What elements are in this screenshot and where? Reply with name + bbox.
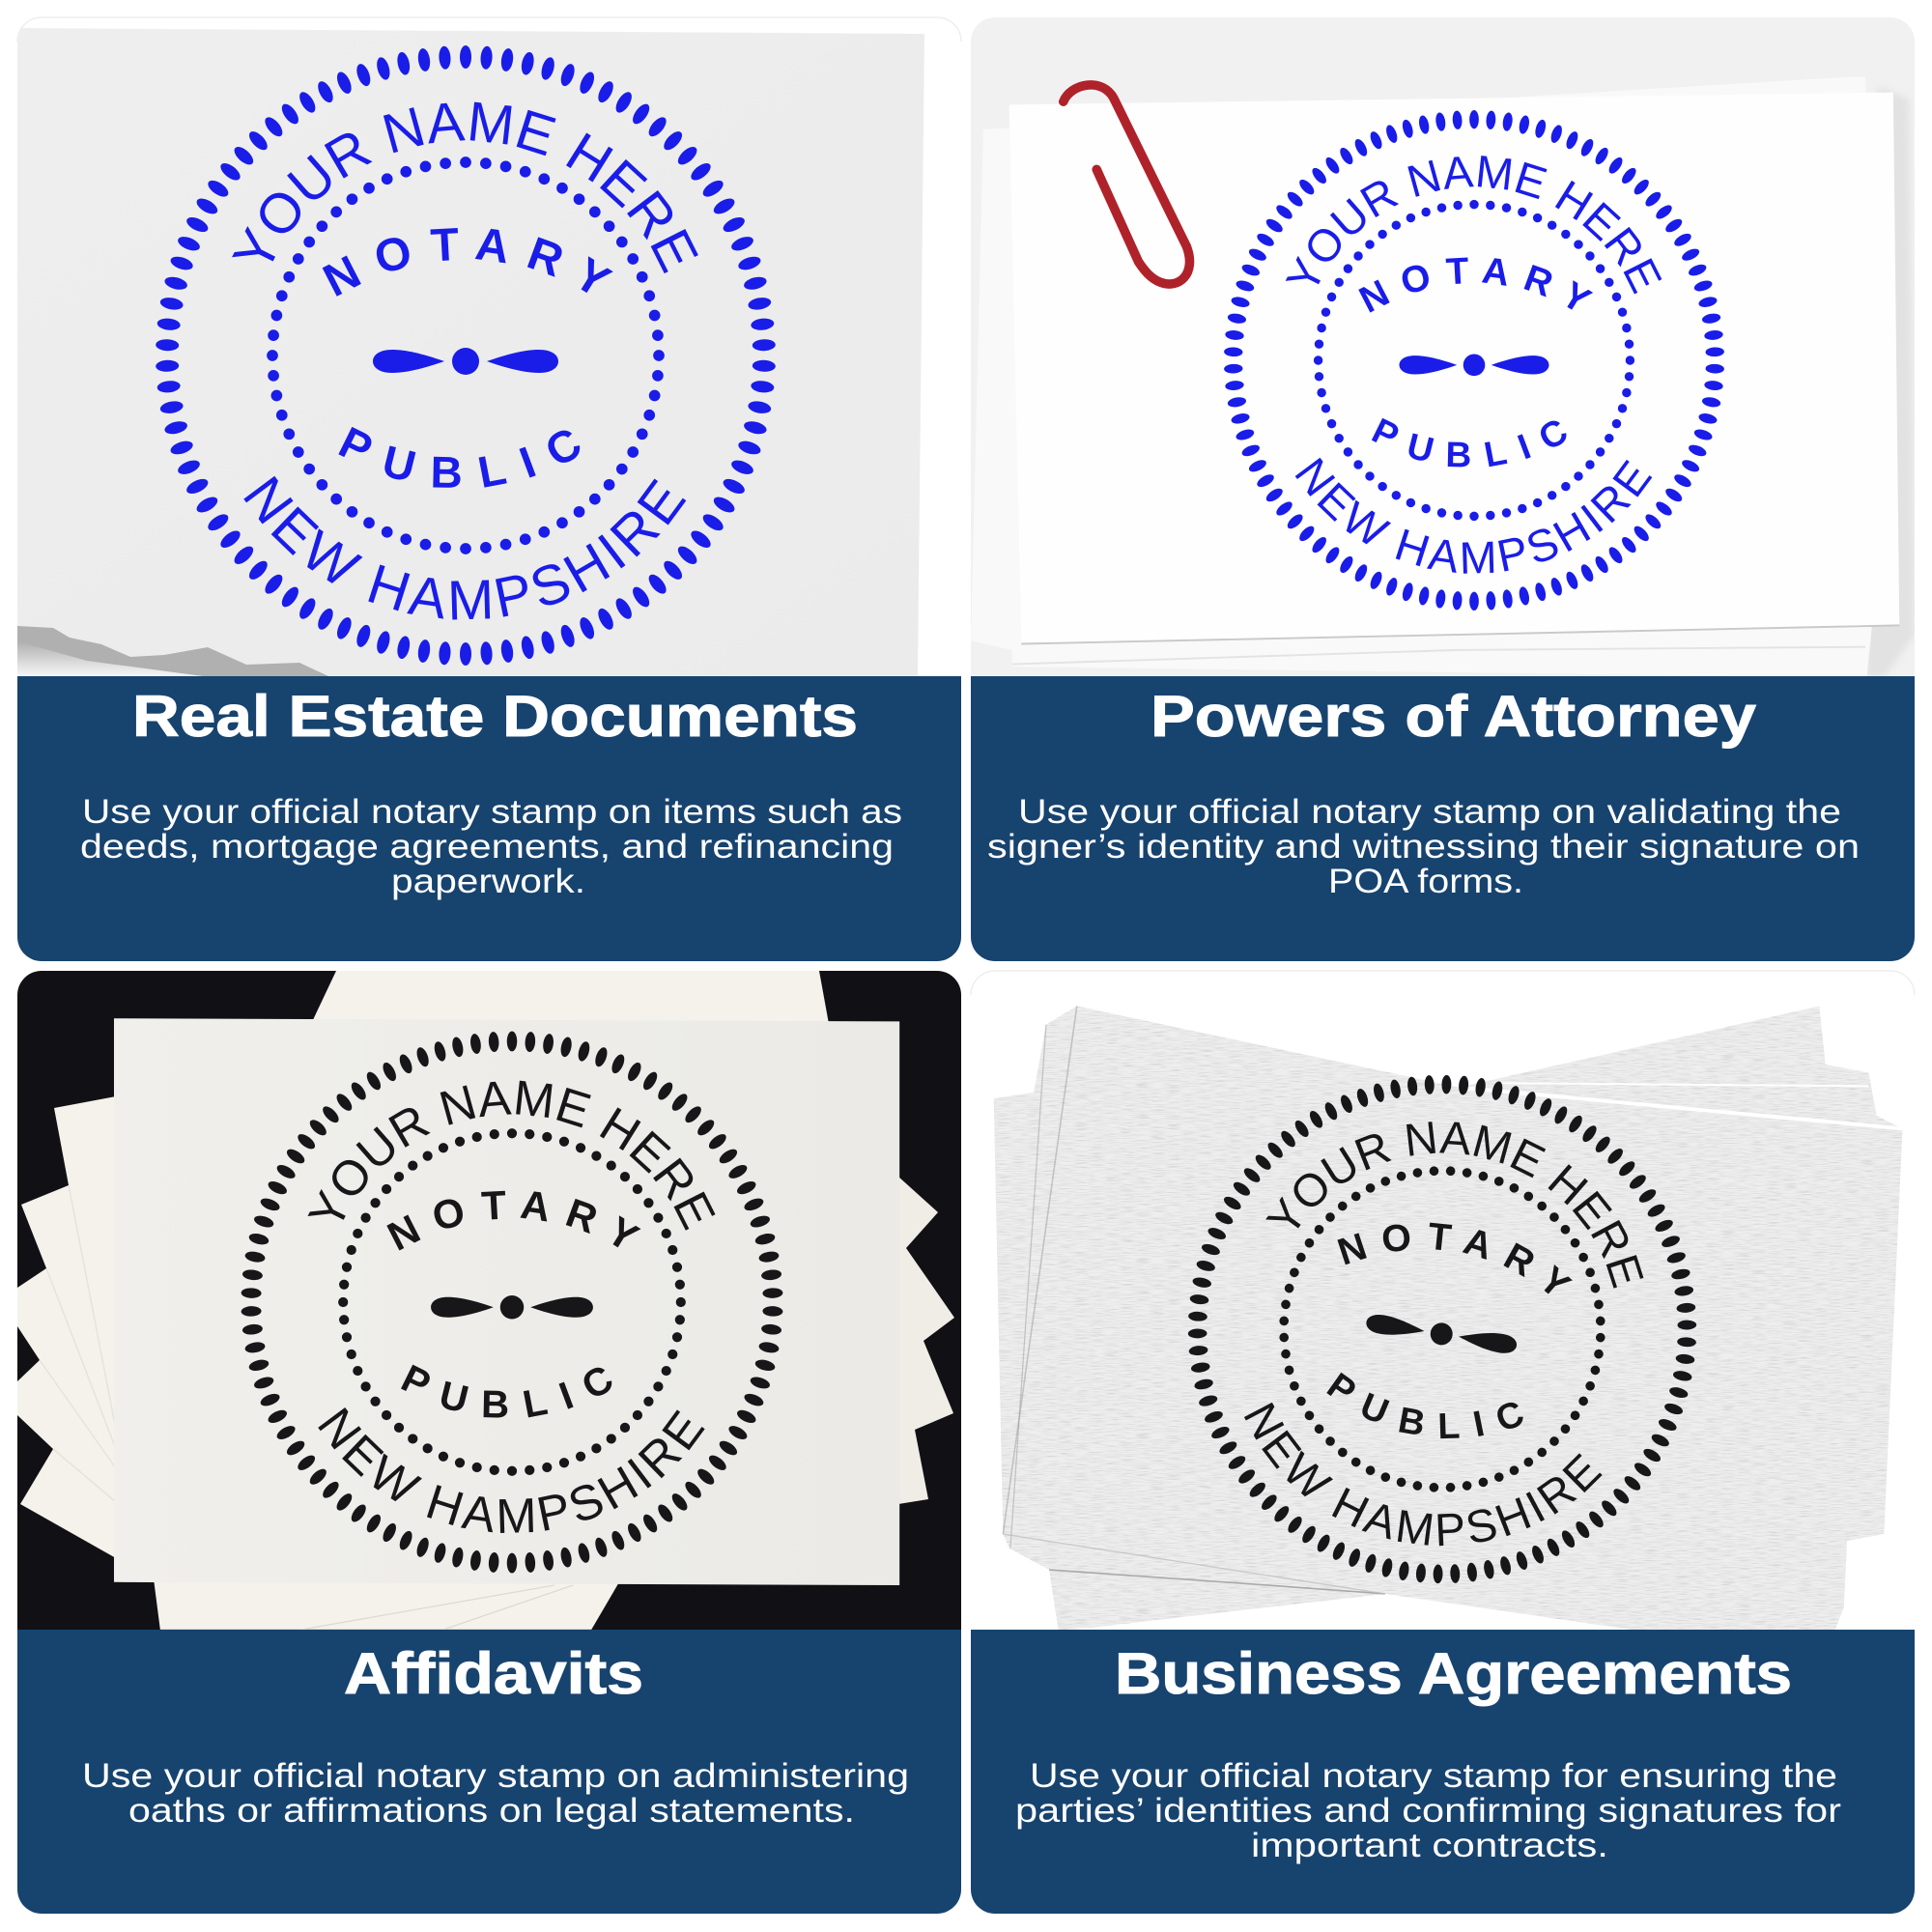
text: notary: NOTARY (323, 228, 613, 297)
stamp: blue notary seal (156, 45, 776, 666)
panel: Affidavits (17, 971, 961, 1914)
text: new hampshire: NEW HAMPSHIRE (1294, 458, 1652, 574)
photo: paper stack with paperclip (971, 17, 1915, 678)
body text: oaths or affirmations on legal statements. (128, 1792, 855, 1830)
icon: red paperclip (1064, 85, 1189, 284)
text: new hampshire: NEW HAMPSHIRE (1244, 1403, 1602, 1546)
text: public: PUBLIC (1372, 417, 1567, 468)
caption band (971, 676, 1915, 961)
body text: Use your official notary stamp on validating the (1018, 793, 1841, 831)
heading: Real Estate Documents (132, 684, 858, 749)
panel: Business Agreements (970, 970, 1915, 1914)
stamp: black notary seal (242, 1032, 782, 1573)
inner dotted ring (1319, 205, 1630, 516)
inner dotted ring (343, 1133, 681, 1471)
text: public: PUBLIC (401, 1364, 612, 1418)
body text: parties’ identities and confirming signatures for (1015, 1792, 1841, 1830)
outer oval ring (66, 0, 866, 738)
caption band (971, 1630, 1915, 1914)
text: notary: NOTARY (1358, 257, 1594, 313)
text: new hampshire: NEW HAMPSHIRE (243, 475, 686, 620)
text: your name here: YOUR NAME HERE (1265, 1122, 1644, 1289)
panel: Powers of Attorney (971, 17, 1915, 961)
body text: important contracts. (1251, 1827, 1608, 1864)
ornament (431, 1295, 593, 1319)
text: notary: NOTARY (1337, 1223, 1573, 1294)
body text: deeds, mortgage agreements, and refinancing (80, 828, 894, 866)
text: public: PUBLIC (338, 427, 580, 488)
heading: Business Agreements (1115, 1641, 1792, 1706)
photo: textured paper stack (971, 971, 1915, 1632)
outer oval ring (1151, 51, 1797, 669)
body text: POA forms. (1328, 863, 1523, 900)
text: new hampshire: NEW HAMPSHIRE (318, 1407, 705, 1533)
caption band (17, 1630, 961, 1914)
photo: fanned cream cards on black (17, 971, 961, 1630)
ornament (1400, 355, 1548, 376)
panel: Real Estate Documents (17, 16, 962, 961)
stamp: blue notary seal (1224, 110, 1724, 611)
body text (987, 793, 1860, 900)
body text: paperwork. (391, 863, 585, 900)
inner dotted ring (272, 162, 659, 549)
text: public: PUBLIC (1326, 1372, 1523, 1439)
body text: signer’s identity and witnessing their signature on (987, 828, 1860, 866)
text: your name here: YOUR NAME HERE (1285, 156, 1662, 294)
heading: Affidavits (344, 1641, 643, 1706)
caption band (17, 676, 961, 961)
body text (80, 793, 902, 900)
ornament (373, 348, 558, 375)
photo: torn grey paper (17, 17, 961, 676)
outer oval ring (1069, 968, 1815, 1690)
body text: Use your official notary stamp for ensuring the (1030, 1757, 1837, 1795)
inner dotted ring (1261, 1148, 1624, 1511)
stamp: black notary seal, rotated (1188, 1074, 1696, 1584)
body text (82, 1757, 909, 1830)
body text: Use your official notary stamp on administering (82, 1757, 909, 1795)
body text (1015, 1757, 1841, 1864)
text: your name here: YOUR NAME HERE (232, 102, 698, 274)
body text: Use your official notary stamp on items such as (82, 793, 902, 831)
outer oval ring (162, 968, 862, 1636)
text: your name here: YOUR NAME HERE (307, 1080, 715, 1231)
text: notary: NOTARY (386, 1190, 641, 1250)
ornament (1365, 1311, 1519, 1357)
heading: Powers of Attorney (1151, 684, 1757, 749)
main white card (114, 1018, 899, 1585)
